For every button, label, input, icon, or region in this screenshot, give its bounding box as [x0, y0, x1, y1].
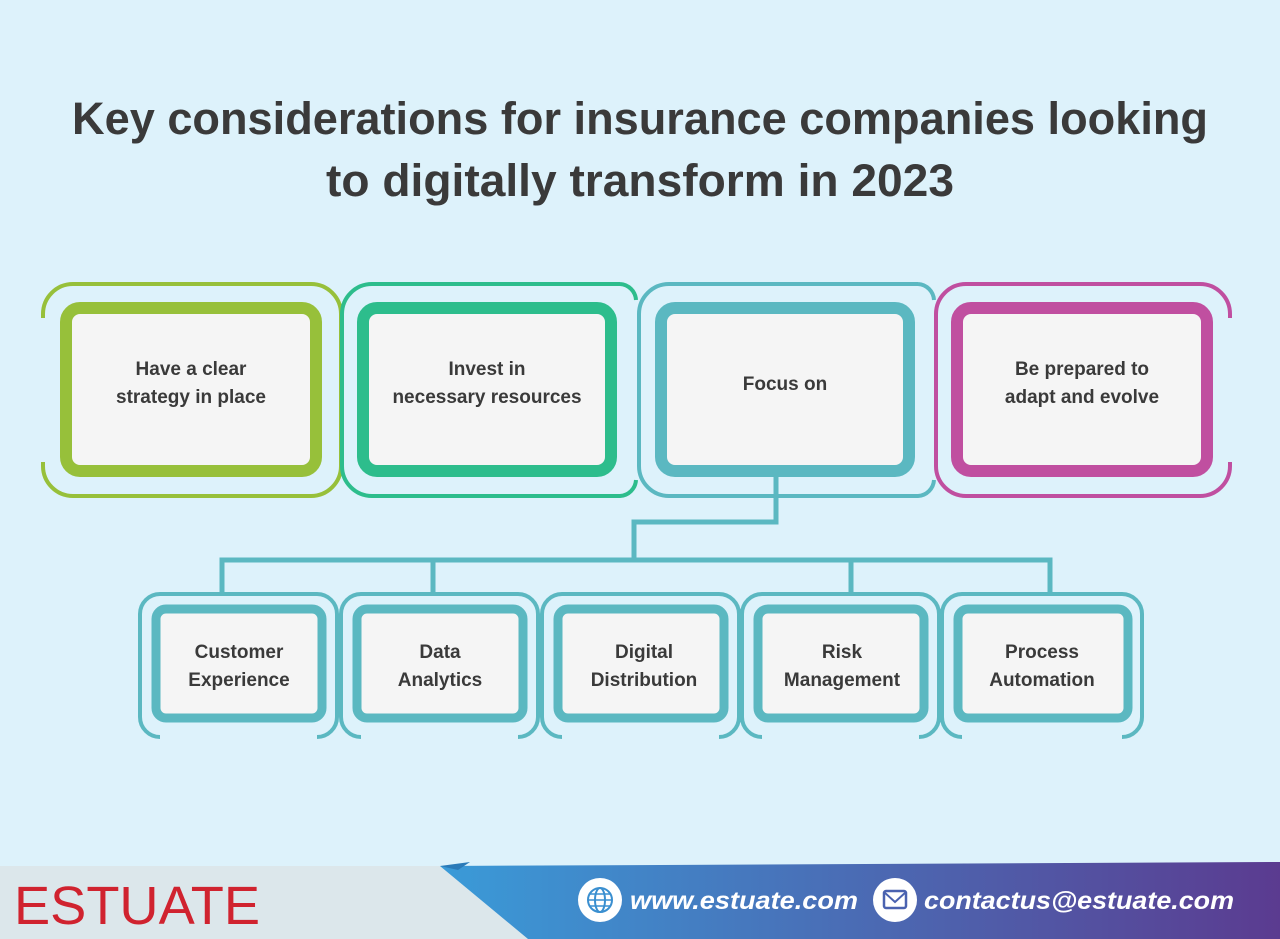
sub-card: risk management: Management: [784, 670, 901, 691]
email: contactus@estuate.com: [924, 887, 1234, 915]
sub-card: customer experience: [140, 594, 337, 737]
card: focus on: Focus on: [743, 374, 827, 395]
sub-card: process automation: [942, 594, 1142, 737]
footer: [0, 862, 1280, 939]
sub-card: data analytics: [341, 594, 538, 737]
title: [72, 93, 1208, 206]
card: strategy: [43, 284, 341, 496]
sub-card: digital distribution: [542, 594, 739, 737]
card: strategy: strategy in place: [116, 387, 266, 408]
sub-card: data analytics: Analytics: [398, 670, 482, 691]
card: resources: Invest in: [448, 359, 526, 380]
sub-card: risk management: Risk: [822, 642, 862, 663]
icon: globe: [578, 878, 622, 922]
card: adapt: Be prepared to: [1015, 359, 1149, 380]
sub-card: digital distribution: Distribution: [591, 670, 697, 691]
sub-card: process automation: Process: [1005, 642, 1079, 663]
sub-card: risk management: [742, 594, 939, 737]
card: adapt: [936, 284, 1230, 496]
card: focus on: [639, 284, 934, 496]
icon: mail: [873, 878, 917, 922]
title: to digitally transform in 2023: [326, 155, 954, 206]
sub-card: process automation: Automation: [989, 670, 1095, 691]
card: resources: [342, 284, 636, 496]
title: Key considerations for insurance companies looking: [72, 93, 1208, 144]
sub-card: customer experience: Experience: [188, 670, 290, 691]
connectors: [222, 477, 1050, 594]
card: strategy: Have a clear: [136, 359, 247, 380]
card: adapt: adapt and evolve: [1005, 387, 1159, 408]
website: www.estuate.com: [630, 887, 858, 915]
logo: ESTUATE: [14, 876, 260, 936]
sub-cards: [140, 594, 1142, 737]
sub-card: digital distribution: Digital: [615, 642, 673, 663]
sub-card: data analytics: Data: [419, 642, 461, 663]
card: resources: necessary resources: [392, 387, 582, 408]
sub-card: customer experience: Customer: [195, 642, 284, 663]
